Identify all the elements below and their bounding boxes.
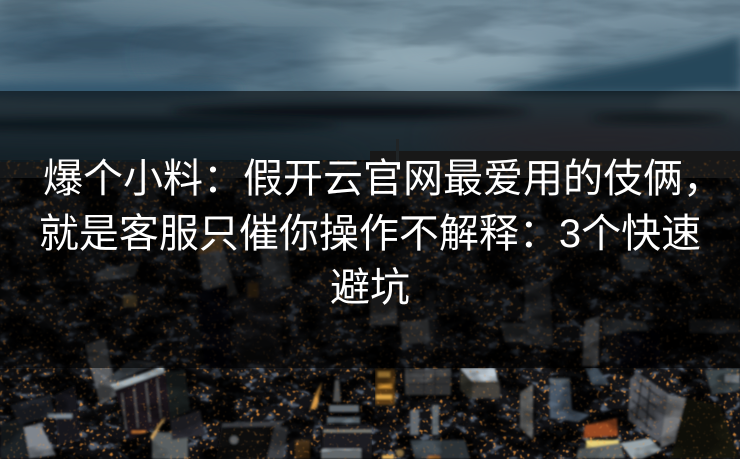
fine light texture over buildings: [0, 178, 740, 459]
city base with lights: [0, 160, 740, 459]
title: 爆个小料：假开云官网最爱用的伎俩，: [43, 157, 723, 201]
sky: [0, 0, 740, 194]
title: 避坑: [330, 266, 410, 310]
midtown buildings seen through the overlay: [85, 232, 740, 405]
title: 就是客服只催你操作不解释：3个快速: [39, 212, 701, 256]
foreground buildings, left: [0, 360, 372, 459]
distant skyline: [0, 139, 740, 213]
foreground buildings, right: [375, 368, 740, 459]
title: [39, 157, 723, 310]
dark overlay band: [0, 91, 740, 368]
